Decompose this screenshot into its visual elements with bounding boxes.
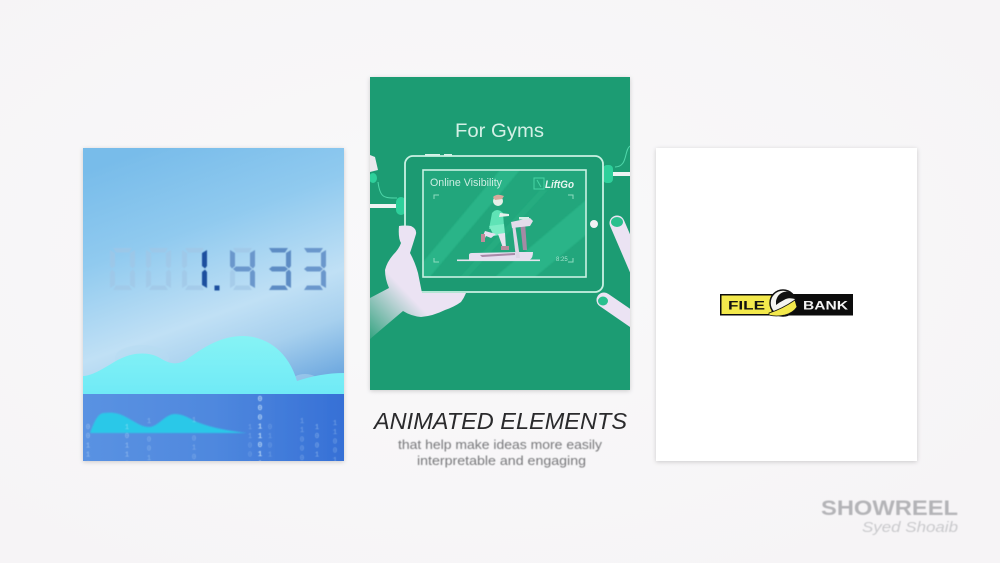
watermark: showreel: SHOWREEL — [821, 497, 958, 520]
time stamp: 8:25 — [556, 257, 568, 263]
tablet body — [405, 156, 603, 292]
subtitle — [398, 437, 603, 468]
heading: Animated Elements: ANIMATED ELEMENTS — [372, 408, 628, 434]
watermark: showreel — [821, 497, 958, 536]
binary code columns: 1 00110 — [145, 418, 153, 482]
cables and connectors — [369, 146, 630, 215]
binary code columns: 1011011 — [123, 424, 131, 488]
bright binary column: 000110111 — [256, 396, 264, 479]
binary code columns: 01011 — [266, 424, 274, 470]
binary code columns: 1001 — [313, 424, 321, 461]
logo: File Bank — [720, 290, 853, 316]
viewfinder corners — [434, 195, 573, 262]
runner — [481, 195, 509, 250]
data band — [83, 394, 344, 461]
binary code columns: 110001 — [298, 418, 306, 473]
area wave — [83, 336, 344, 395]
logo: File Bank: FILE — [728, 298, 765, 312]
subtitle: that help make ideas more easily — [398, 437, 603, 452]
logo: File Bank: BANK — [803, 298, 848, 312]
binary code columns: 1011 1010 — [175, 397, 183, 480]
lower area wave — [90, 413, 247, 433]
binary code columns: 110011 — [246, 424, 254, 479]
watermark: showreel: Syed Shoaib — [862, 519, 958, 536]
tablet screen — [423, 170, 586, 285]
binary code columns: 00110011 — [84, 424, 92, 498]
panel: white logo card — [656, 148, 917, 461]
binary code columns — [86, 417, 337, 461]
binary code columns: 11001 — [331, 420, 339, 466]
label: Online Visibility: Online Visibility — [430, 177, 502, 189]
right fingers — [596, 216, 630, 327]
binary code columns: 1 0101 — [190, 417, 198, 472]
back glow hills — [296, 374, 314, 381]
panel: blue data animation — [83, 148, 347, 498]
left hand — [370, 226, 466, 339]
tablet home button — [590, 220, 598, 228]
logo: LiftGo — [534, 178, 574, 191]
binary code columns: 1011010 — [339, 396, 347, 460]
binary code columns: 0110101100 — [99, 398, 107, 490]
logo: LiftGo: LiftGo — [545, 179, 574, 191]
panel: green gyms tablet — [369, 77, 638, 390]
subtitle: interpretable and engaging — [417, 453, 586, 468]
heading: For Gyms: For Gyms — [455, 120, 544, 142]
digital counter — [110, 248, 326, 290]
treadmill — [457, 217, 540, 261]
